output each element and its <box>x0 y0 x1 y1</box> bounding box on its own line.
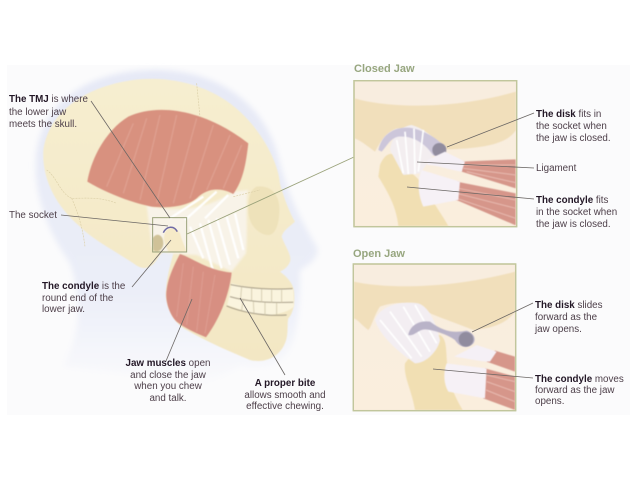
label: open jaw condyle: opens. <box>535 396 564 407</box>
ligament fibres <box>390 125 440 175</box>
label: the condyle: round end of the <box>42 293 114 304</box>
panel: open jaw <box>353 264 516 411</box>
heading: closed jaw: Closed Jaw <box>354 63 415 75</box>
label: the TMJ: the lower jaw <box>9 107 67 118</box>
joint <box>153 218 187 252</box>
label: closed jaw condyle: the jaw is closed. <box>536 219 611 230</box>
panel border <box>354 81 517 227</box>
upper tendon <box>427 152 465 172</box>
label: closed jaw disk: the jaw is closed. <box>536 133 611 144</box>
label: closed jaw disk: The disk fits in <box>536 109 601 120</box>
connector line to closed jaw <box>187 157 354 234</box>
disk <box>408 321 475 347</box>
upper muscle <box>487 351 515 372</box>
background panel <box>7 65 630 415</box>
label: a proper bite: A proper bite <box>255 378 316 389</box>
teeth <box>227 283 294 315</box>
ligament strands <box>397 128 423 174</box>
label: open jaw condyle: forward as the jaw <box>535 385 615 396</box>
lower tendon <box>419 170 460 207</box>
panel border <box>353 264 516 411</box>
lower muscle <box>455 182 516 225</box>
label: jaw muscles: and talk. <box>149 393 187 404</box>
ligament fibres <box>375 303 440 363</box>
disk <box>378 128 446 156</box>
skull bone <box>354 272 515 330</box>
head silhouette halo <box>36 70 318 383</box>
label: the condyle: lower jaw. <box>42 304 85 315</box>
skull bone <box>43 79 295 361</box>
label: the TMJ: The TMJ is where <box>9 94 88 105</box>
label: a proper bite: effective chewing. <box>246 401 324 412</box>
label: a proper bite: allows smooth and <box>244 390 326 401</box>
label: ligament: Ligament <box>536 163 577 174</box>
label: open jaw disk: The disk slides <box>535 300 603 311</box>
masseter muscle <box>166 254 232 337</box>
label: the condyle: The condyle is the <box>42 281 125 292</box>
temporalis muscle <box>87 110 248 207</box>
label: jaw muscles: Jaw muscles open <box>126 358 210 369</box>
leader lines <box>61 101 285 375</box>
lower muscle <box>483 368 515 410</box>
label: open jaw condyle: The condyle moves <box>535 374 624 385</box>
head illustration <box>36 70 318 383</box>
lower tendon <box>444 363 487 398</box>
leader lines over closed jaw <box>407 113 534 199</box>
tendon fibres <box>170 192 243 272</box>
label: closed jaw condyle: in the socket when <box>536 207 617 218</box>
upper tendon <box>454 345 497 362</box>
label: closed jaw disk: the socket when <box>536 121 607 132</box>
label: the socket: The socket <box>9 210 57 221</box>
label: open jaw disk: forward as the <box>535 312 598 323</box>
tendon area <box>147 190 248 272</box>
cranial sutures <box>47 83 260 247</box>
panel background <box>353 264 516 411</box>
label: closed jaw condyle: The condyle fits <box>536 195 608 206</box>
heading: open jaw: Open Jaw <box>353 248 405 260</box>
label: open jaw disk: jaw opens. <box>534 324 582 335</box>
skull bone <box>355 92 516 152</box>
label: jaw muscles: and close the jaw <box>130 370 207 381</box>
condyle <box>405 335 463 410</box>
panel background <box>354 81 517 227</box>
leader lines over open jaw <box>433 303 533 378</box>
label: jaw muscles: when you chew <box>133 381 203 392</box>
upper muscle <box>462 159 516 188</box>
eye socket <box>248 186 279 235</box>
panel: closed jaw <box>354 81 517 227</box>
condyle <box>378 154 448 226</box>
label: the TMJ: meets the skull. <box>9 119 77 130</box>
